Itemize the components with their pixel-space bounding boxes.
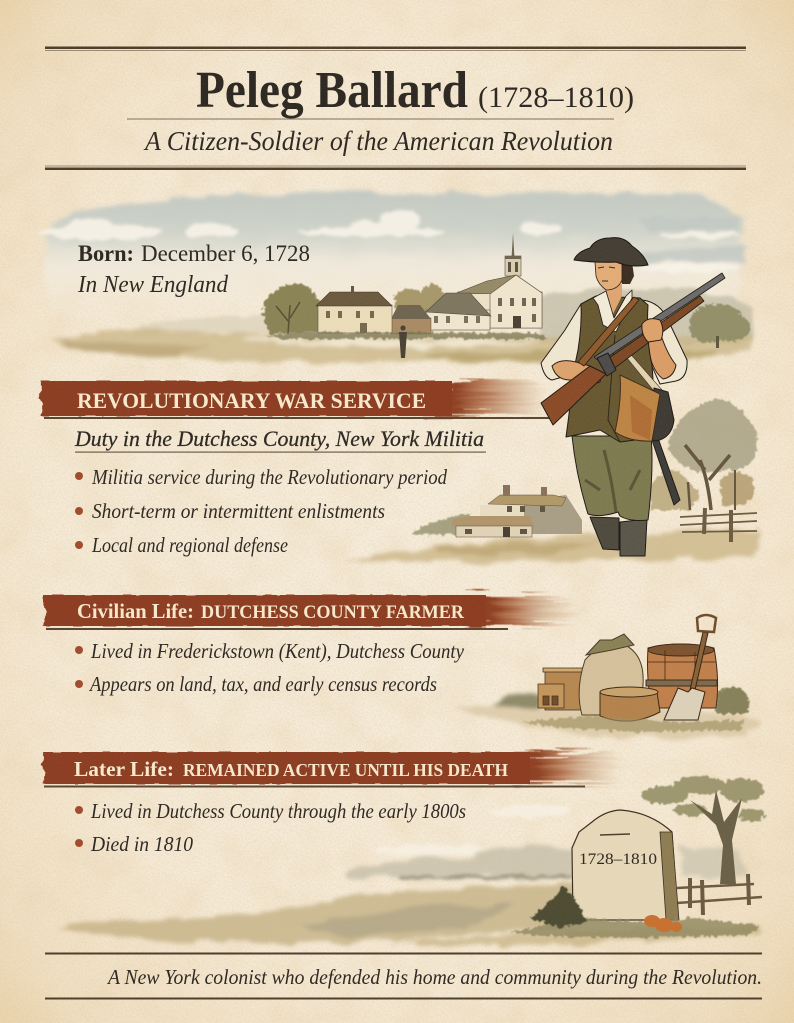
field wash (55, 884, 760, 945)
banner heading (74, 757, 508, 781)
subtitle: A Citizen-Soldier of the American Revolution (143, 126, 613, 156)
bush right (716, 687, 749, 714)
hair (619, 258, 634, 284)
left forearm and hand (552, 361, 600, 386)
tree left (263, 284, 322, 334)
scabbard (652, 438, 680, 505)
banner (38, 381, 550, 416)
banner (41, 752, 620, 784)
grain sack (579, 634, 643, 715)
woven basket (600, 687, 660, 721)
ground (450, 694, 760, 738)
right forearm (646, 336, 676, 379)
illustration: distant scene behind later life (55, 806, 760, 945)
crates (538, 668, 585, 710)
clouds (40, 209, 740, 273)
closing statement: A New York colonist who defended his home and community during the Revolution. (106, 965, 762, 989)
service list: Short-term or intermittent enlistments (92, 499, 385, 523)
headstone dates: 1728–1810 (579, 851, 657, 868)
civilian list: Lived in Frederickstown (Kent), Dutchess County (90, 639, 465, 663)
barrel (646, 644, 718, 708)
birth details: Born: (78, 241, 134, 266)
shrubs along village (265, 332, 548, 339)
foreground field (48, 329, 755, 363)
grass (510, 918, 760, 938)
tricorn hat (574, 238, 648, 266)
illustration: farmhouse and trees behind soldier (340, 399, 760, 562)
distant hills (130, 288, 752, 342)
boots (590, 517, 647, 556)
banner heading: REVOLUTIONARY WAR SERVICE (77, 388, 426, 413)
pumpkins (644, 915, 682, 932)
illustration: gravestone (510, 776, 765, 938)
service list: Militia service during the Revolutionary period (91, 465, 447, 489)
sky wash (44, 192, 745, 320)
dark pouch (652, 388, 674, 441)
small brick house (391, 305, 431, 334)
breeches (572, 436, 652, 520)
shovel (664, 615, 716, 720)
panel: Civilian Life (43, 595, 575, 696)
left sleeve (541, 304, 581, 380)
banner heading (77, 599, 464, 623)
service list (75, 465, 447, 557)
left house (316, 286, 392, 333)
civilian list: Appears on land, tax, and early census records (88, 672, 437, 696)
background trees (650, 399, 757, 510)
farmhouse (452, 485, 582, 537)
right sleeve (640, 300, 687, 384)
duty subheading: Duty in the Dutchess County, New York Militia (74, 426, 484, 451)
distant hills (345, 845, 745, 878)
tree trunks (685, 445, 735, 510)
banner heading: DUTCHESS COUNTY FARMER (201, 602, 464, 623)
undergrowth (520, 716, 745, 732)
tree right (689, 304, 750, 348)
musket (541, 273, 725, 425)
vest (566, 296, 657, 442)
fence (677, 874, 762, 915)
panel: Revolutionary War Service (38, 381, 560, 557)
hand on musket (642, 319, 663, 342)
headstone (572, 810, 679, 920)
birth details (77, 241, 310, 298)
ground (340, 530, 760, 562)
banner heading: Civilian Life: (77, 599, 194, 623)
service list: Local and regional defense (91, 533, 288, 557)
illustration: colonial village landscape (40, 192, 755, 363)
banner heading: Later Life: (74, 757, 174, 781)
life dates: (1728–1810) (478, 81, 634, 114)
panel: Later Life (41, 752, 620, 856)
birth details: In New England (77, 272, 229, 298)
distant figure (399, 325, 407, 358)
tan haversack (615, 375, 660, 441)
middle house (426, 293, 491, 330)
illustration: militia soldier with musket (541, 238, 725, 556)
illustration: farm goods (450, 615, 760, 738)
wooden fence (680, 508, 757, 542)
neck (606, 284, 622, 316)
later life list: Died in 1810 (90, 832, 193, 856)
face (595, 260, 622, 290)
leather strap (578, 297, 639, 366)
shrubs (410, 515, 470, 535)
title: Peleg Ballard (196, 62, 468, 119)
civilian list (75, 639, 465, 696)
banner (43, 595, 575, 626)
birth details: December 6, 1728 (141, 241, 310, 266)
later life list (75, 799, 466, 856)
later life list: Lived in Dutchess County through the early 1800s (90, 799, 466, 823)
collar and shirt (593, 290, 632, 332)
distant clouds (375, 806, 570, 855)
tree (641, 776, 765, 884)
pale bag strap (622, 350, 662, 396)
header (45, 46, 746, 170)
trees behind village (394, 284, 446, 316)
weeds (530, 886, 586, 928)
banner heading: REMAINED ACTIVE UNTIL HIS DEATH (183, 760, 508, 780)
church (454, 233, 542, 328)
hill treeline (400, 875, 570, 879)
